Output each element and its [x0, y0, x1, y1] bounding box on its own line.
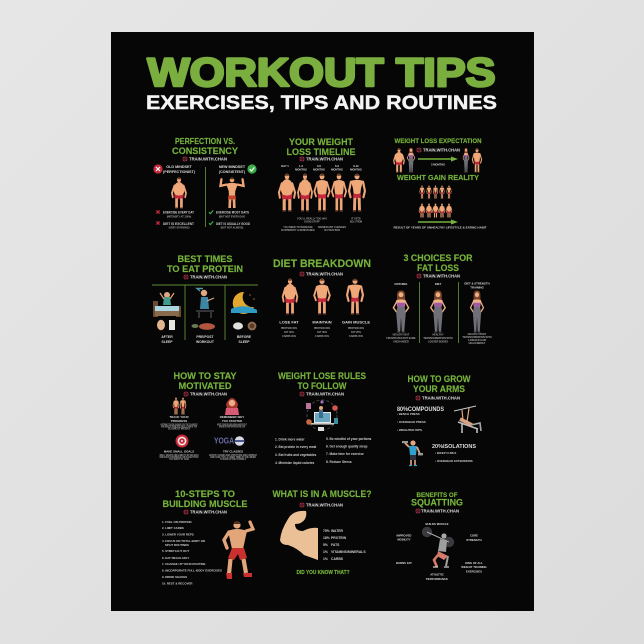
list: compounds: 80%COMPOUNDS: [397, 407, 444, 413]
list: rules one to four: [275, 438, 317, 465]
handle: train with chan: TRAIN.WITH.CHAN: [190, 392, 228, 397]
text: new mindset: (CONSISTENT): [219, 170, 246, 174]
list: old mindset: [156, 210, 195, 230]
labels: times: [161, 335, 252, 344]
list: rules one to four: 3. Eat fruits and vegetables: [275, 453, 317, 457]
handle: train with chan: TRAIN.WITH.CHAN: [423, 274, 461, 279]
captions: choices: LOOSER BODIES: [428, 340, 448, 344]
handle: train with chan: TRAIN.WITH.CHAN: [421, 509, 460, 514]
text: 3 months: 3 MONTHS: [431, 162, 445, 166]
diet: lose fat: PROTEIN 40%: [281, 327, 298, 330]
figure: bodybuilder in red shorts: [224, 521, 253, 579]
list: muscle composition: 5%: [323, 543, 328, 547]
labels: benefits: WEIGHT TRAINING: [461, 565, 487, 569]
icon: crescent moon: [231, 292, 257, 314]
heading: best times to eat protein: BEST TIMES: [178, 254, 232, 264]
panel: weight loss timeline: [279, 137, 365, 232]
text: remember why: WRITE YOUR REASON DOWN AND READ IT: [217, 424, 247, 426]
diet: lose fat: CARBS 30%: [282, 335, 297, 338]
icon: egg and milk: [157, 320, 175, 330]
labels: choices: DIET: [435, 282, 441, 286]
timeline captions: IN YOUR BOD: [324, 229, 340, 232]
labels: choices: NOTHING: [395, 282, 407, 286]
list: new mindset: [209, 210, 251, 230]
heading: how to grow your arms: YOUR ARMS: [413, 383, 465, 394]
diet: lose fat: [279, 320, 299, 338]
timeline labels: MONTHS: [313, 168, 325, 172]
list: new mindset: DIET IS USUALLY GOOD: [216, 222, 251, 226]
handle: train with chan: TRAIN.WITH.CHAN: [306, 392, 345, 397]
list: rules five to eight: 6. Get enough quality sleep: [326, 444, 367, 448]
captions: choices: UNCHANGED: [393, 340, 409, 344]
text: remember why: REMEMBER WHY: [220, 415, 244, 419]
captions: choices: HEALTHY: [432, 334, 444, 336]
icon: green check badge: [247, 164, 257, 174]
captions: choices: TRANSFORMATION WITH: [423, 337, 453, 340]
text: new mindset: [219, 165, 246, 174]
list: rules one to four: 2. Eat protein in every meal: [275, 445, 316, 449]
handle: train with chan: TRAIN.WITH.CHAN: [190, 275, 228, 280]
list: ten steps: 5. STRETCH IT OUT: [162, 549, 189, 553]
list: compounds: • OVERHEAD PRESS: [397, 420, 426, 424]
text: track your progress: SLOWEST WEEKS: [168, 428, 190, 430]
diet: maintain: MAINTAIN: [312, 320, 332, 324]
list: isolations: • OVERHEAD EXTENSIONS: [435, 459, 473, 463]
subtitle: EXERCISES, TIPS AND ROUTINES: [146, 92, 497, 114]
labels: benefits: ATHLETIC: [430, 572, 444, 576]
diet: lose fat: FAT 30%: [284, 331, 295, 334]
list: ten steps: 8. INCORPORATE FULL-BODY EXERCISES: [162, 568, 222, 572]
heading: weight lose rules: [278, 371, 366, 391]
figure: muscular body: [220, 178, 244, 208]
labels: times: SLEEP: [238, 340, 250, 344]
figures: lean row: [420, 185, 451, 199]
panel: perfection vs consistency: [153, 137, 257, 230]
heading: your weight loss timeline: [286, 137, 356, 158]
text: old mindset: [163, 165, 196, 174]
diet: gain muscle: PROTEIN 30%: [348, 327, 365, 330]
list: rules five to eight: 8. Reduce Stress: [326, 460, 352, 464]
heading: benefits of squatting: BENEFITS OF: [416, 492, 458, 499]
heading: weight gain reality: WEIGHT GAIN REALITY: [397, 173, 479, 182]
list: rules five to eight: [326, 437, 372, 464]
list: ten steps: 3. LOWER YOUR REPS: [162, 532, 194, 536]
text: try classes: GROUP CLASSES ADD STRUCTURE AND COMPANY: [209, 454, 257, 457]
handle: train with chan: TRAIN.WITH.CHAN: [306, 272, 344, 277]
heading: perfection vs consistency: CONSISTENCY: [172, 146, 238, 156]
figures: body progression: [279, 174, 365, 212]
timeline captions: [281, 218, 362, 232]
figure: overweight body: [172, 177, 186, 209]
labels: choices: TRAINING: [470, 286, 484, 290]
icon: flexed arm: [280, 511, 318, 560]
timeline labels: DAY 1: [281, 164, 289, 168]
icon: laptop and health ring: [306, 400, 338, 431]
timeline labels: 3-6: [317, 164, 321, 168]
diet: maintain: CARBS 35%: [315, 335, 330, 338]
figures: before: [394, 148, 415, 173]
list: muscle composition: [323, 529, 366, 561]
text: track your progress: KEEPING TRACK SHOWS YOU THE CHANGES: [160, 424, 198, 426]
labels: times: AFTER: [161, 335, 173, 339]
timeline captions: GOOD STUFF: [304, 220, 320, 224]
diet: maintain: PROTEIN 30%: [314, 327, 331, 330]
labels: benefits: BURNS FAT: [396, 561, 412, 565]
text: make small goals: ONE BUILDS CONFIDENCE FOR THE NEXT STEP: [160, 456, 199, 459]
list: ten steps: [162, 520, 222, 586]
heading: how to grow your arms: [408, 373, 471, 394]
panel: ten steps to building muscle: [162, 488, 253, 586]
list: ten steps: 10. REST & RECOVER: [162, 582, 193, 586]
icon: meat and greens: [192, 323, 215, 330]
diet: maintain: [312, 320, 332, 338]
handle: train with chan: TRAIN.WITH.CHAN: [189, 157, 228, 162]
labels: benefits: EXERCISES: [466, 570, 482, 574]
heading: 10 steps: [162, 488, 248, 509]
list: rules one to four: 1. Drink more water: [275, 438, 305, 442]
text: old mindset: (PERFECTIONIST): [163, 170, 196, 174]
list: compounds: [397, 407, 444, 432]
title: WORKOUT TIPS: [148, 51, 496, 95]
labels: benefits: IMPROVED: [397, 534, 411, 538]
text: try classes: AND GIVE YOU A FIXED TIME IN THE WEEK: [210, 456, 256, 459]
figures: heavier row: [419, 203, 452, 218]
text: make small goals: YOU WANT TO TAKE: [169, 458, 189, 461]
heading: diet breakdown: DIET BREAKDOWN: [273, 258, 371, 270]
list: old mindset: EXERCISE EVERY DAY: [163, 210, 195, 214]
list: old mindset: (VERY STARVING): [169, 226, 190, 230]
labels: times: BEFORE: [237, 335, 252, 339]
list: ten steps: 4. FOCUS ON TOTAL-BODY OR: [162, 539, 206, 543]
timeline labels: [281, 164, 362, 172]
list: new mindset: EXERCISE MOST DAYS: [216, 210, 250, 214]
heading: 10 steps: 10-STEPS TO: [175, 488, 235, 499]
text: try classes: [209, 450, 257, 461]
list: ten steps: 7. CHANGE UP YOUR ROUTINE: [162, 562, 205, 566]
heading: best times to eat protein: [167, 254, 243, 274]
heading: best times to eat protein: TO EAT PROTEIN: [167, 264, 243, 274]
heading: how to stay motivated: HOW TO STAY: [174, 370, 237, 381]
heading: 3 choices for fat loss: FAT LOSS: [417, 263, 459, 273]
text: try classes: TRY CLASSES: [223, 450, 243, 454]
panel: what is in a muscle: [272, 489, 372, 576]
panel: weight loss expectation and gain reality: [394, 138, 487, 230]
icon: progress bodies: [173, 397, 186, 415]
labels: benefits: KING OF ALL: [465, 561, 483, 565]
list: isolations: • BICEP CURLS: [435, 451, 456, 455]
heading: how to stay motivated: MOTIVATED: [178, 380, 232, 391]
heading: 3 choices for fat loss: [404, 253, 473, 273]
heading: benefits of squatting: [411, 492, 463, 508]
panel: how to grow your arms: [397, 373, 481, 466]
heading: how to grow your arms: HOW TO GROW: [408, 373, 471, 384]
poster sheet: [111, 32, 534, 611]
list: muscle composition: VITAMINS/MINERALS: [331, 550, 366, 554]
captions: choices: A BIGGER GAIN: [468, 339, 486, 342]
text: remember why: YOU STARTED: [222, 419, 242, 423]
list: muscle composition: 18%: [323, 536, 330, 540]
panel: diet breakdown: [273, 258, 371, 338]
icon: man curling dumbbell: [402, 440, 423, 466]
timeline labels: 9-12: [353, 164, 359, 168]
icon: person in bed: [153, 292, 181, 317]
labels: benefits: MOBILITY: [397, 538, 411, 542]
list: muscle composition: 75%: [323, 529, 330, 533]
text: old mindset: OLD MINDSET: [166, 165, 192, 169]
labels: benefits: PERFORMANCE: [426, 577, 448, 581]
panel: benefits of squatting: [396, 492, 487, 581]
timeline captions: SIGNIFICANT CHANGES: [318, 226, 346, 229]
captions: choices: HEALTHY BUT: [393, 334, 410, 336]
heading: perfection vs consistency: [172, 137, 238, 156]
figures: three body types: [283, 279, 363, 315]
text: remember why: [217, 415, 247, 428]
timeline captions: YOU NEED TO INCREASE: [283, 226, 313, 229]
icon: woman stretching: [196, 288, 214, 318]
heading: your weight loss timeline: LOSS TIMELINE: [286, 147, 356, 158]
labels: choices: DIET & STRENGTH: [464, 282, 490, 286]
text: new mindset: NEW MINDSET: [219, 165, 246, 169]
text: make small goals: [160, 450, 199, 461]
list: muscle composition: FATS: [331, 543, 340, 547]
panel: how to stay motivated: [160, 370, 257, 461]
list: ten steps: 6. EAT REGULARLY: [162, 556, 189, 560]
captions: choices: TRANSFORMATION WITH: [462, 336, 492, 339]
list: rules five to eight: 5. Be mindful of your portions: [326, 437, 372, 441]
icon: bench press: [454, 406, 481, 433]
panel: three choices for fat loss: [386, 253, 492, 345]
list: new mindset: (BUT NOT EVERY DAY): [219, 216, 245, 218]
handle: train with chan: TRAIN.WITH.CHAN: [423, 148, 461, 153]
labels: times: WORKOUT: [196, 340, 215, 344]
text: make small goals: MAKE SMALL GOALS: [164, 450, 194, 454]
list: muscle composition: 1%: [323, 550, 328, 554]
timeline captions: IN INTENSITY & RESISTANCE: [281, 229, 315, 232]
labels: times: PRE/POST: [196, 335, 214, 339]
captions: choices: [386, 333, 492, 345]
arrow: years: [418, 220, 458, 224]
heading: perfection vs consistency: PERFECTION VS.: [175, 137, 235, 146]
list: compounds: • WEIGHTED DIPS: [397, 428, 422, 432]
diet: lose fat: LOSE FAT: [279, 320, 299, 324]
list: rules five to eight: 7. Make time for exercise: [326, 452, 364, 456]
caption: result of years: RESULT OF YEARS OF UNHEALTHY LIFESTYLE & EATING HABIT: [394, 226, 487, 230]
heading: weight lose rules: TO FOLLOW: [298, 381, 347, 391]
list: isolations: [432, 444, 476, 463]
figures: three women: [393, 291, 483, 333]
list: isolations: 20%ISOLATIONS: [432, 444, 476, 450]
arrow: 3 months: [418, 156, 458, 162]
timeline labels: 6-9: [335, 164, 339, 168]
timeline labels: MONTHS: [350, 168, 362, 172]
diet: gain muscle: CARBS 45%: [349, 335, 364, 338]
text: try classes: TO SHOW UP FOR YOURSELF: [220, 458, 246, 461]
list: muscle composition: PROTEIN: [331, 536, 347, 540]
list: muscle composition: WATER: [331, 529, 344, 533]
timeline labels: 1-3: [299, 164, 303, 168]
heading: your weight loss timeline: YOUR WEIGHT: [289, 137, 353, 148]
panel: best times to eat protein: [152, 254, 258, 344]
handle: train with chan: TRAIN.WITH.CHAN: [306, 157, 344, 162]
text: remember why: WHENEVER MOTIVATION RUNS LOW: [219, 426, 245, 428]
text: track your progress: AND MAKES THEM FEEL REAL, EVEN IN THE: [161, 426, 197, 428]
heading: benefits of squatting: SQUATTING: [411, 498, 463, 508]
list: ten steps: 9. DRINK SHAKES: [162, 575, 187, 579]
captions: choices: FRUSTRATED BUT SAME: [386, 337, 416, 340]
labels: benefits: BUILDS MUSCLE: [426, 522, 449, 526]
labels: choices: [395, 282, 490, 290]
diet: gain muscle: FAT 25%: [351, 331, 362, 334]
panel: weight lose rules to follow: [275, 371, 372, 465]
list: old mindset: (INTENSITY AT 110%): [167, 216, 191, 218]
text: track your progress: PROGRESS: [171, 419, 187, 423]
icon: two bowls: [233, 322, 256, 330]
text: make small goals: SMALL TARGETS ARE EASIER TO HIT AND EACH: [160, 454, 199, 457]
timeline captions: SOLUTION: [350, 220, 362, 224]
list: ten steps: SPLIT ROUTINES: [165, 543, 189, 547]
list: ten steps: 1. FUEL ON PROTEIN: [162, 520, 192, 524]
captions: choices: HEALTHY BODY: [468, 333, 487, 336]
diet: gain muscle: GAIN MUSCLE: [342, 320, 370, 324]
timeline labels: MONTHS: [331, 168, 343, 172]
list: rules one to four: 4. Minimize liquid calories: [275, 461, 315, 465]
list: new mindset: (BUT NOT ALWAYS): [221, 226, 244, 230]
timeline labels: MONTHS: [295, 168, 307, 172]
diet: maintain: FAT 35%: [317, 331, 328, 334]
captions: choices: HIGH ENERGY: [469, 342, 486, 345]
list: compounds: • BENCH PRESS: [397, 412, 420, 416]
handle: train with chan: TRAIN.WITH.CHAN: [190, 510, 228, 515]
heading: weight lose rules: WEIGHT LOSE RULES: [278, 371, 366, 381]
icon: target: [176, 434, 188, 448]
heading: 10 steps: BUILDING MUSCLE: [162, 498, 248, 509]
timeline captions: IT GETS: [351, 218, 361, 220]
handle: train with chan: TRAIN.WITH.CHAN: [306, 503, 344, 508]
icon: yoga badge: YOGA: [214, 436, 234, 446]
text: track your progress: [160, 415, 198, 430]
list: old mindset: DIET IS EXCELLENT: [163, 222, 194, 226]
callout: did you know: DID YOU KNOW THAT?: [296, 570, 350, 576]
figures: after: [463, 148, 482, 173]
figure: barbell squat: [422, 527, 454, 567]
diet: gain muscle: [342, 320, 370, 338]
handle: train with chan: TRAIN.WITH.CHAN: [422, 396, 461, 401]
heading: weight loss expectation: WEIGHT LOSS EXPECTATION: [394, 138, 482, 145]
heading: 3 choices for fat loss: 3 CHOICES FOR: [404, 253, 473, 263]
list: muscle composition: CARBS: [331, 557, 344, 561]
icon: red cross badge: [153, 164, 163, 174]
labels: times: SLEEP: [161, 340, 173, 344]
text: track your progress: TRACK YOUR: [169, 415, 190, 419]
labels: benefits: CORE: [470, 534, 478, 538]
list: muscle composition: 1%: [323, 557, 328, 561]
labels: benefits: [396, 522, 487, 581]
heading: how to stay motivated: [174, 370, 237, 391]
timeline captions: YOU'LL REALLY TOO ANY: [297, 218, 327, 220]
heading: what is in a muscle: WHAT IS IN A MUSCLE?: [272, 489, 372, 499]
labels: benefits: STRENGTH: [466, 538, 482, 542]
list: ten steps: 2. LIMIT CARBS: [162, 526, 184, 530]
icon: woman remembering: [225, 398, 239, 415]
